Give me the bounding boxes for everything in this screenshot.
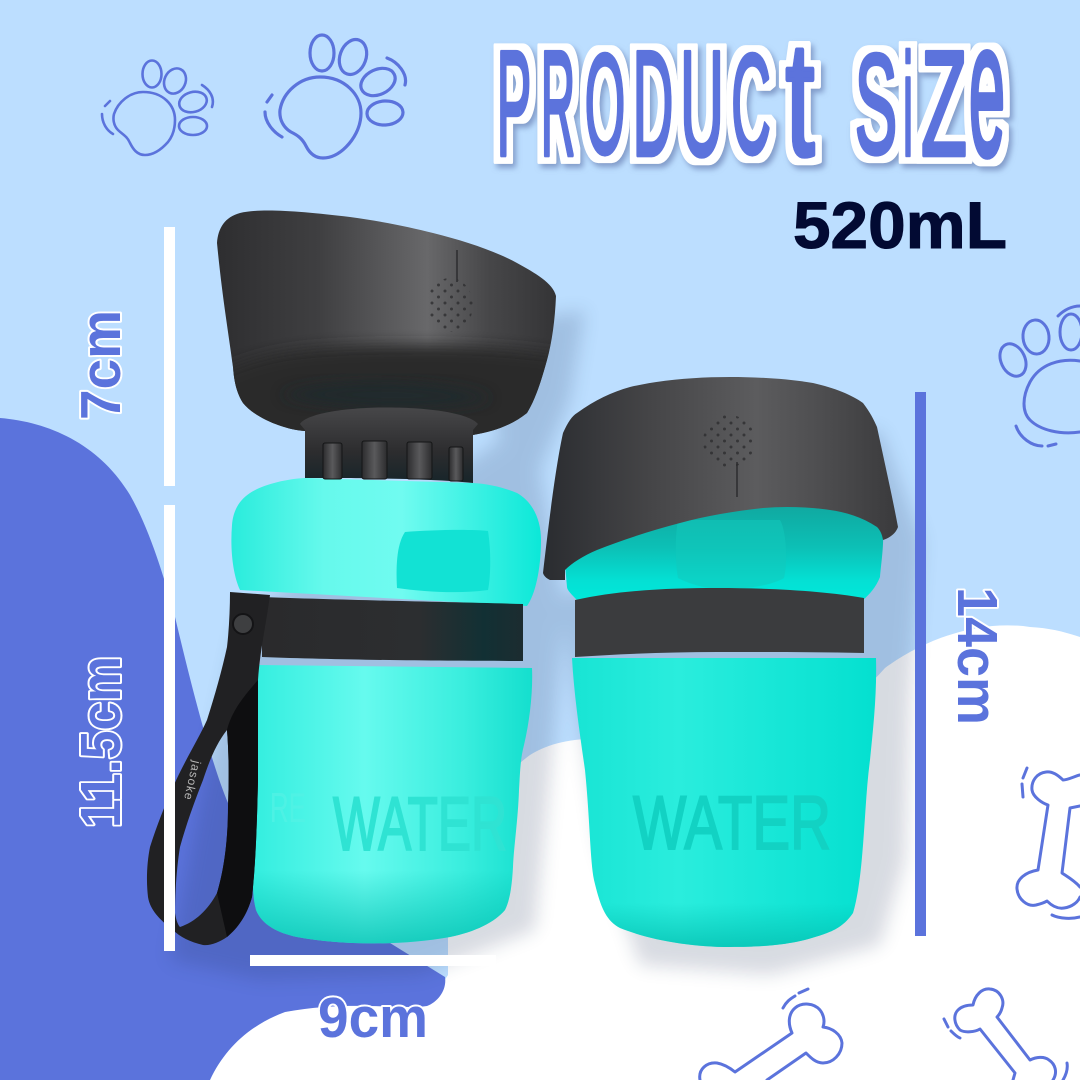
icon: paw 3 — [995, 306, 1080, 446]
WATER embossed: WATER — [633, 781, 831, 866]
strap back layer — [217, 680, 258, 937]
capacity label: 520mL — [793, 188, 1007, 262]
blue wave left — [0, 418, 445, 1080]
bowl logo — [427, 250, 473, 332]
strap label: jasoke — [181, 758, 204, 802]
title: i — [903, 24, 913, 186]
dimension: 14cm — [915, 392, 1009, 936]
dimension: 14cm: 14cm — [945, 587, 1009, 725]
lid logo — [703, 415, 755, 497]
lower body — [572, 658, 876, 947]
dimension: 11.5cm: 11.5cm — [69, 656, 133, 828]
bottle window — [397, 530, 490, 592]
title: t — [785, 8, 815, 190]
neck — [300, 408, 478, 483]
white wave bottom — [210, 625, 1080, 1080]
icon: bone 1 — [1017, 768, 1080, 918]
icon: bone 3 — [944, 989, 1067, 1080]
lower body shading — [253, 700, 530, 943]
band — [575, 588, 864, 657]
title: D — [633, 20, 673, 187]
WATER embossed: WATER — [333, 782, 507, 867]
dimension: 9cm: 9cm — [318, 986, 428, 1050]
upper body — [565, 505, 883, 600]
title: R — [541, 20, 575, 187]
bowl — [217, 210, 556, 435]
shadows — [170, 310, 922, 980]
waist band — [262, 597, 523, 661]
snap button — [233, 614, 253, 634]
icon: paw 1 — [102, 60, 213, 155]
bottle left — [147, 210, 560, 945]
dimension: 11.5cm — [69, 505, 175, 951]
strap — [147, 592, 270, 945]
lid — [543, 377, 898, 580]
title: P — [497, 20, 531, 187]
title: Z — [921, 20, 967, 187]
title — [497, 0, 1005, 196]
icon: bone 2 — [700, 989, 842, 1080]
icon: paw 2 — [265, 35, 406, 158]
title: O — [585, 25, 625, 183]
upper body — [231, 478, 541, 606]
title: C — [731, 25, 771, 183]
dimension: 7cm — [69, 227, 175, 486]
bowl lower shade — [232, 338, 550, 435]
neck ridges — [323, 441, 463, 481]
lower body shading — [578, 800, 866, 947]
dimension: 7cm: 7cm — [69, 310, 133, 420]
dimension: 9cm — [250, 955, 496, 1050]
faint embossed RE: RE — [270, 784, 306, 831]
lower body — [253, 665, 532, 943]
bottle right — [543, 377, 898, 947]
title: S — [855, 25, 897, 183]
title: U — [680, 20, 724, 187]
body window — [676, 520, 786, 589]
